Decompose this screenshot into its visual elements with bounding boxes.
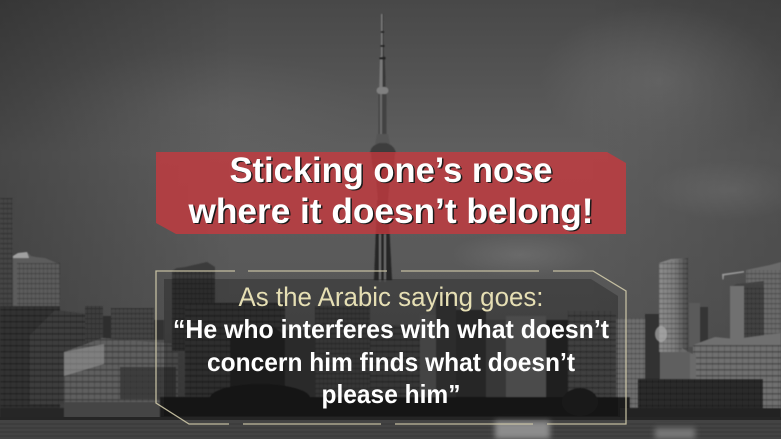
- red title banner: [156, 151, 626, 234]
- title text: Sticking one’s nose: [230, 151, 552, 190]
- quote body: please him”: [322, 379, 460, 409]
- title text: where it doesn’t belong!: [189, 193, 595, 232]
- quote panel frame: [156, 271, 626, 424]
- quote panel backing: [164, 279, 618, 416]
- photo: CN Tower: [370, 14, 396, 282]
- quote text: [173, 282, 609, 409]
- photo: lake water: [0, 417, 781, 439]
- quote body: [173, 314, 609, 409]
- photo: left skyline buildings: [0, 198, 178, 418]
- quote body: “He who interferes with what doesn’t: [173, 314, 609, 344]
- quote lead-in: As the Arabic saying goes:: [238, 282, 544, 312]
- title text: [187, 151, 595, 232]
- photo: central skyline behind the quote: [160, 262, 660, 419]
- quote body: concern him finds what doesn’t: [207, 347, 575, 377]
- title text: Sticking one’s nose: [231, 152, 554, 191]
- title text: where it doesn’t belong!: [187, 192, 594, 231]
- photo: right skyline buildings: [620, 258, 781, 418]
